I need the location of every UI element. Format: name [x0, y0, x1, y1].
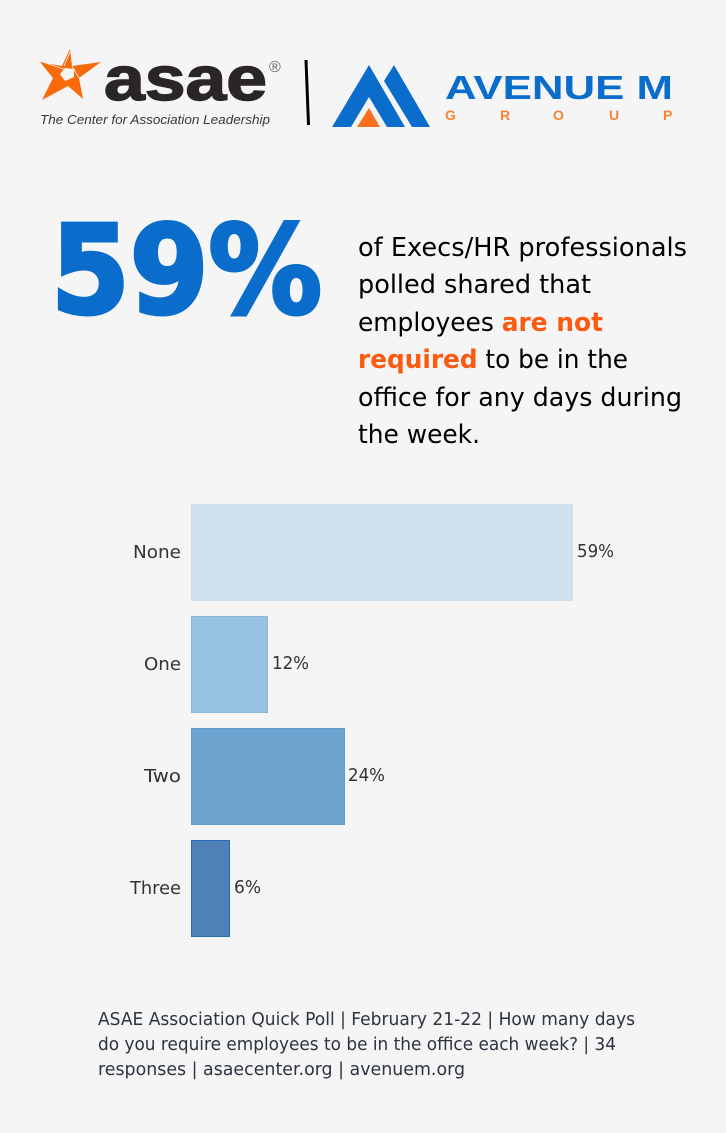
statistic description: employees are not [358, 308, 603, 338]
footer source note: ASAE Association Quick Poll | February 21-22 | How many days [98, 1009, 635, 1030]
statistic description: polled shared that [358, 270, 591, 300]
logo: ASAE [40, 45, 281, 127]
footer source note: responses | asaecenter.org | avenuem.org [98, 1059, 465, 1080]
big statistic: 59% [51, 200, 322, 342]
bar: Three 6%: Three [129, 878, 181, 899]
bar: One 12%: 12% [272, 653, 309, 674]
Group wordmark: GROUP [445, 107, 672, 123]
ASAE tagline: The Center for Association Leadership [40, 112, 270, 127]
bar: None 59%: None [133, 542, 181, 563]
statistic description: the week. [358, 420, 480, 450]
ASAE wordmark: asae [104, 45, 267, 114]
statistic description: of Execs/HR professionals [358, 233, 687, 263]
bar: None 59% [133, 504, 614, 601]
footer source note: do you require employees to be in the office each week? | 34 [98, 1034, 616, 1055]
bar: Two 24% [143, 728, 385, 824]
Avenue M wordmark: AVENUE M [445, 69, 673, 106]
bar: Two 24%: Two [143, 766, 181, 787]
icon: Avenue M mountains [332, 65, 430, 127]
logo: Avenue M Group [332, 65, 673, 127]
statistic description: office for any days during [358, 383, 682, 413]
bar chart [129, 504, 614, 936]
bar: None 59%: 59% [577, 541, 614, 562]
statistic description: required to be in the [358, 345, 628, 375]
logo divider [306, 60, 308, 125]
registered mark: ® [269, 59, 281, 76]
statistic description [358, 233, 687, 450]
bar: Three 6%: 6% [234, 877, 261, 898]
footer source note [98, 1009, 635, 1080]
bar: One 12%: One [144, 654, 181, 675]
bar: Two 24%: 24% [348, 765, 385, 786]
bar: One 12% [144, 616, 309, 712]
bar: Three 6% [129, 840, 261, 936]
icon: ASAE star [40, 49, 101, 100]
